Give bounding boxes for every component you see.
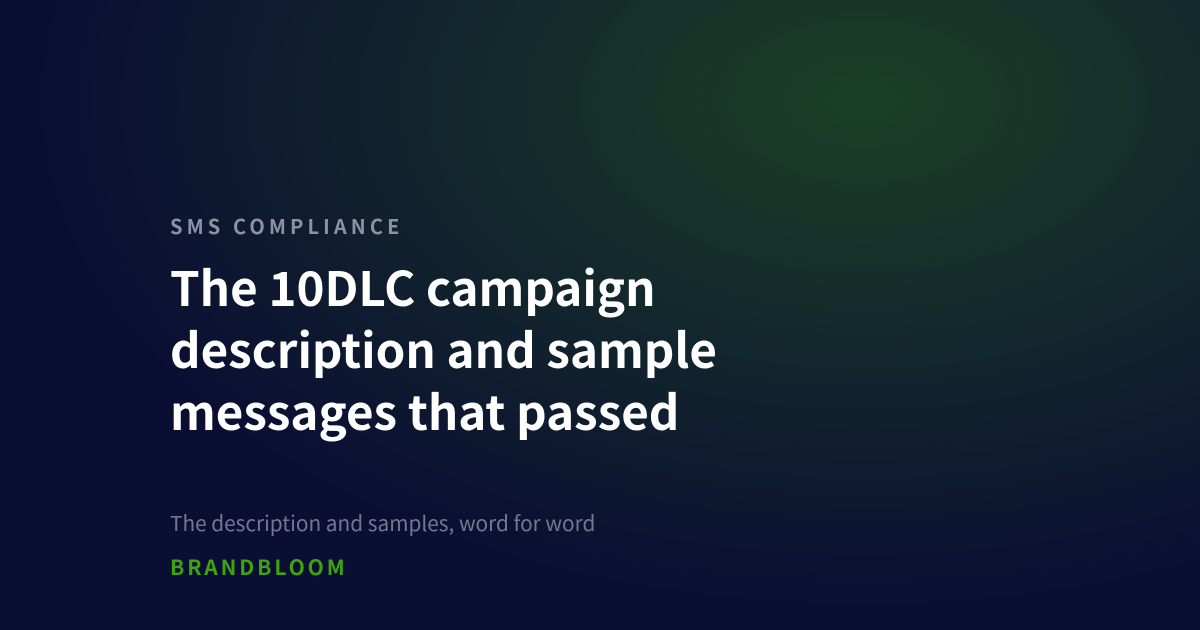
title: The 10DLC campaign	[170, 251, 656, 320]
title	[170, 251, 717, 444]
eyebrow label: SMS COMPLIANCE	[170, 211, 403, 240]
brand name: BRANDBLOOM	[170, 552, 348, 582]
subtitle: The description and samples, word for word	[170, 507, 595, 537]
title: description and sample	[170, 313, 717, 382]
title: messages that passed	[170, 375, 679, 444]
